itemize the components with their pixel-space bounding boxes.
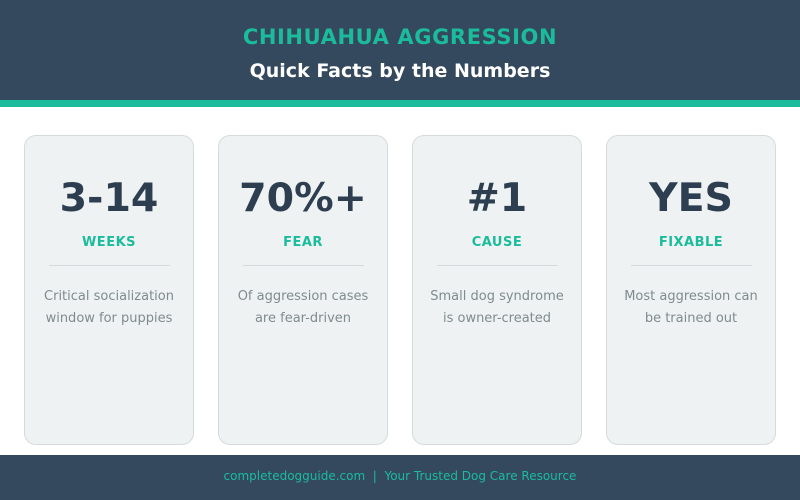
label: WEEKS (82, 235, 136, 250)
description: be trained out (645, 311, 737, 326)
description: is owner-created (443, 311, 551, 326)
card: weeks (24, 135, 194, 445)
description: are fear-driven (255, 311, 351, 326)
description (44, 289, 174, 326)
description: Critical socialization (44, 289, 174, 304)
number: YES (649, 175, 733, 221)
subtitle: Quick Facts by the Numbers (250, 60, 550, 82)
description: Of aggression cases (238, 289, 368, 304)
number: 70%+ (239, 175, 367, 221)
label: CAUSE (472, 235, 522, 250)
description: window for puppies (46, 311, 172, 326)
description (624, 289, 758, 326)
label: FEAR (283, 235, 323, 250)
description: Most aggression can (624, 289, 758, 304)
number: 3-14 (60, 175, 158, 221)
header (0, 0, 800, 100)
card: fear (218, 135, 388, 445)
footer: completedogguide.com | Your Trusted Dog Care Resource (224, 469, 576, 483)
label: FIXABLE (659, 235, 723, 250)
description (430, 289, 564, 326)
description: Small dog syndrome (430, 289, 564, 304)
title: CHIHUAHUA AGGRESSION (243, 25, 557, 49)
card: cause (412, 135, 582, 445)
number: #1 (467, 175, 527, 221)
footer (0, 455, 800, 500)
description (238, 289, 368, 326)
card: fixable (606, 135, 776, 445)
accent bar (0, 100, 800, 107)
